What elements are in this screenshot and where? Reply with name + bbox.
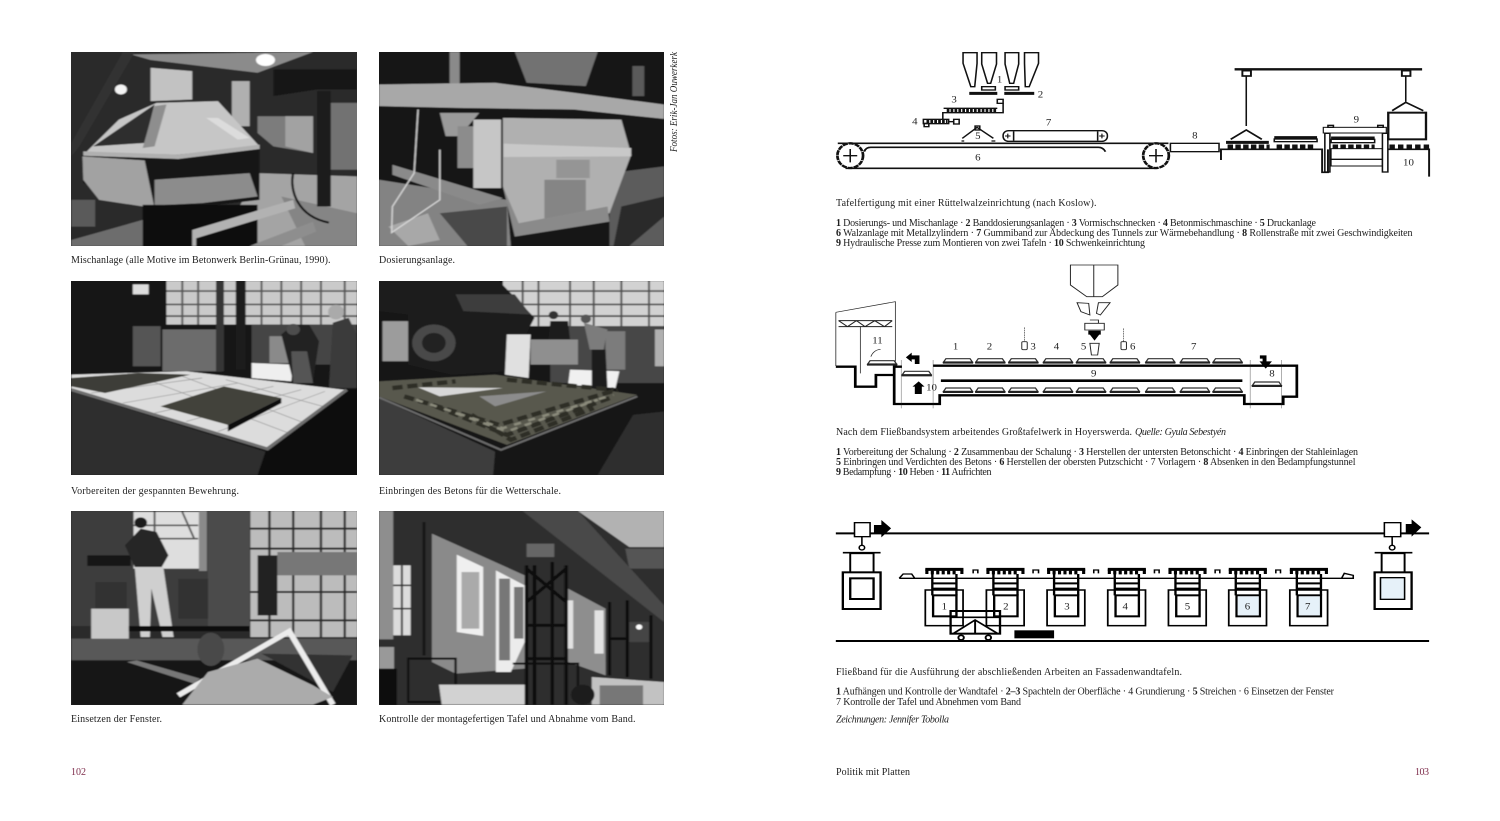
diagram 1: panel production with vibrating roller unit: 4 (912, 117, 918, 127)
legend: diagram 1: 9 Hydraulische Presse zum Montieren von zwei Tafeln · 10 Schwenkeinrichtung (836, 238, 1145, 249)
diagram 2: assembly-line plant in Hoyerswerda (835, 264, 1298, 408)
caption: inspection: Kontrolle der montagefertigen Tafel und Abnahme vom Band. (379, 714, 636, 725)
page number left: 102 (71, 767, 86, 778)
caption: diagram 1: Tafelfertigung mit einer Rüttelwalzeinrichtung (nach Koslow). (836, 198, 1096, 209)
page number right: 103 (1415, 767, 1429, 778)
diagram 2: assembly-line plant in Hoyerswerda: 9 (1091, 369, 1096, 379)
caption: concrete: Einbringen des Betons für die Wetterschale. (379, 486, 561, 497)
diagram 3: finishing conveyor: 2 (1003, 602, 1009, 612)
direction arrows (874, 519, 1421, 537)
arrows (906, 331, 1272, 394)
diagram 3: finishing conveyor: 4 (1123, 602, 1128, 612)
caption: reinforcement: Vorbereiten der gespannten Bewehrung. (71, 486, 239, 497)
caption: mixing plant: Mischanlage (alle Motive im Betonwerk Berlin-Grünau, 1990). (71, 255, 330, 266)
legend: diagram 2: 5 Einbringen und Verdichten des Betons · 6 Herstellen der obersten Putzschicht · 7 Vorlagern · 8 Absenken in den Bedampfungstunnel (836, 457, 1356, 468)
legend: diagram 2 (836, 447, 1358, 478)
diagram 1: panel production with vibrating roller unit: 7 (1046, 118, 1051, 128)
diagram 2: assembly-line plant in Hoyerswerda: 6 (1130, 342, 1135, 352)
stations 1 to 7 (925, 569, 1328, 626)
caption: windows: Einsetzen der Fenster. (71, 714, 162, 725)
photo: dosing plant (379, 52, 664, 246)
legend: diagram 1: 1 Dosierungs- und Mischanlage · 2 Banddosierungsanlagen · 3 Vormischschnecken · 4 Betonmischmaschine · 5 Druckanlage (836, 218, 1317, 229)
hanging panels at both ends (843, 523, 1412, 609)
photo credit: Fotos: Erik-Jan Ouwerkerk (669, 51, 680, 153)
legend: diagram 2: 9 Bedampfung · 10 Heben · 11 Aufrichten (836, 467, 992, 478)
legend: diagram 3: 1 Aufhängen und Kontrolle der Wandtafel · 2–3 Spachteln der Oberfläche · 4 Grundierung · 5 Streichen · 6 Einsetzen der Fenster (836, 686, 1335, 698)
diagram 1: panel production with vibrating roller unit: 5 (975, 132, 981, 142)
diagram 3: finishing conveyor: 3 (1064, 602, 1070, 612)
diagram 1: panel production with vibrating roller unit: 6 (975, 153, 981, 163)
diagram 2: assembly-line plant in Hoyerswerda: 8 (1269, 369, 1275, 379)
diagram 3: finishing conveyor: 5 (1185, 602, 1190, 612)
diagram 1: panel production with vibrating roller unit: 8 (1192, 131, 1198, 141)
photo: pouring concrete (379, 281, 664, 475)
diagram 1: panel production with vibrating roller unit: 2 (1038, 90, 1043, 100)
diagram 2: assembly-line plant in Hoyerswerda: 11 (872, 336, 883, 346)
diagram 2: assembly-line plant in Hoyerswerda: 2 (987, 342, 992, 352)
diagram 2: assembly-line plant in Hoyerswerda: 1 (953, 342, 958, 352)
diagram 3: finishing conveyor: 6 (1245, 602, 1250, 612)
photo: mixing plant (71, 52, 357, 246)
legend: diagram 1 (836, 218, 1412, 249)
caption: diagram 2: Nach dem Fließbandsystem arbeitendes Großtafelwerk in Hoyerswerda. (836, 427, 1132, 438)
photo: preparing reinforcement (71, 281, 357, 475)
diagram 3: finishing conveyor: 7 (1305, 602, 1310, 612)
diagram 3: finishing conveyor (836, 519, 1430, 642)
legend: diagram 3 (836, 686, 1335, 708)
running footer: Politik mit Platten (836, 767, 910, 778)
caption: dosing plant: Dosierungsanlage. (379, 255, 455, 266)
caption: diagram 3: Fließband für die Ausführung der abschließenden Arbeiten an Fassadenwandtafeln. (836, 667, 1182, 678)
upper and lower panel rows (867, 359, 1282, 392)
diagram 1: panel production with vibrating roller unit: 9 (1354, 115, 1359, 125)
inspection cart (951, 611, 1000, 640)
diagram 1: panel production with vibrating roller unit: 10 (1403, 158, 1414, 168)
diagram 2: assembly-line plant in Hoyerswerda: 10 (926, 383, 937, 393)
diagram 1: panel production with vibrating roller unit: 3 (951, 95, 957, 105)
legend: diagram 1: 6 Walzanlage mit Metallzylindern · 7 Gummiband zur Abdeckung des Tunnels zur Wärmebehandlung · 8 Rollenstraße mit zwei Geschwindigkeiten (836, 228, 1412, 239)
black block (1014, 630, 1054, 638)
legend: diagram 2: 1 Vorbereitung der Schalung · 2 Zusammenbau der Schalung · 3 Herstellen der untersten Betonschicht · 4 Einbringen der Stahleinlagen (836, 447, 1358, 458)
diagram 2: assembly-line plant in Hoyerswerda: 4 (1054, 342, 1059, 352)
photo: fitting the windows (71, 511, 357, 705)
diagram 2: assembly-line plant in Hoyerswerda: 3 (1030, 342, 1036, 352)
drawing credit: Zeichnungen: Jennifer Tobolla (836, 714, 949, 726)
legend: diagram 3: 7 Kontrolle der Tafel und Abnehmen vom Band (836, 697, 1021, 708)
diagram 1: panel production with vibrating roller unit: 1 (997, 75, 1002, 85)
photo: final inspection (379, 511, 664, 705)
diagram 1: panel production with vibrating roller unit (836, 52, 1430, 177)
caption: diagram 2: Quelle: Gyula Sebestyén (1135, 427, 1226, 438)
diagram 3: finishing conveyor: 1 (942, 602, 947, 612)
diagram 2: assembly-line plant in Hoyerswerda: 7 (1191, 342, 1196, 352)
diagram 2: assembly-line plant in Hoyerswerda: 5 (1081, 342, 1086, 352)
